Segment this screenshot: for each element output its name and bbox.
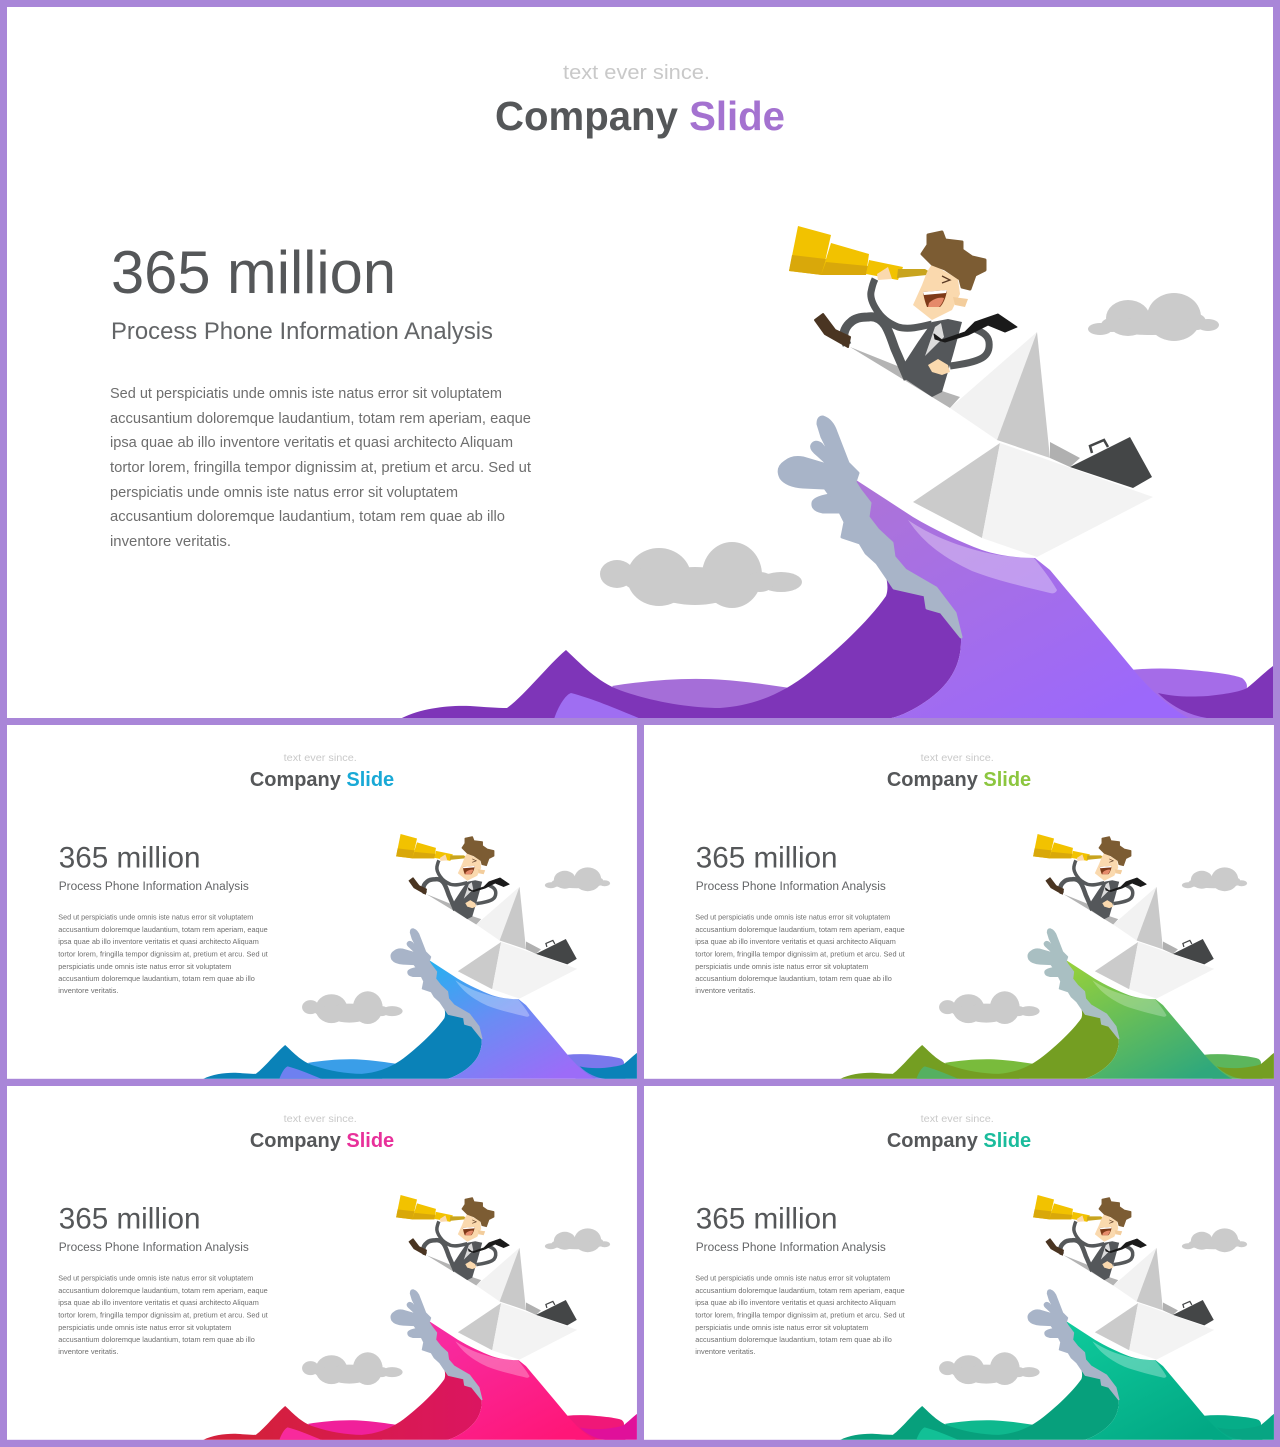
- illustration: pink wave: [203, 1290, 637, 1440]
- body text: Sed ut perspiciatis unde omnis iste natus error sit voluptatem: [58, 1274, 253, 1283]
- body text: accusantium doloremque laudantium, totam rem quae ab illo: [695, 974, 892, 983]
- body text: accusantium doloremque laudantium, totam rem aperiam, eaque: [695, 1286, 905, 1295]
- icon: businessman with telescope: [789, 226, 1017, 397]
- subheading: Process Phone Information Analysis: [59, 1240, 249, 1254]
- body text: inventore veritatis.: [58, 986, 118, 995]
- body text: ipsa quae ab illo inventore veritatis et quasi architecto Aliquam: [58, 1298, 259, 1307]
- body text: ipsa quae ab illo inventore veritatis et quasi architecto Aliquam: [695, 937, 896, 946]
- body text: [58, 913, 269, 995]
- body text: Sed ut perspiciatis unde omnis iste natus error sit voluptatem: [58, 913, 253, 922]
- body text: tortor lorem, fringilla tempor dignissim at, pretium et arcu. Sed ut: [695, 949, 906, 958]
- headline number: 365 million: [111, 239, 396, 306]
- panel: teal slide: [644, 1086, 1274, 1440]
- icon: paper boat with briefcase: [1063, 1248, 1214, 1360]
- body text: accusantium doloremque laudantium, totam rem aperiam, eaque: [695, 925, 905, 934]
- title: Company Slide: [887, 769, 1031, 791]
- illustration: teal wave: [840, 1290, 1274, 1440]
- icon: businessman with telescope: [396, 1195, 510, 1280]
- body text: inventore veritatis.: [58, 1347, 118, 1356]
- icon: businessman with telescope: [396, 834, 510, 919]
- icon: cloud right: [1182, 867, 1247, 891]
- body text: perspiciatis unde omnis iste natus error sit voluptatem: [695, 1323, 868, 1332]
- body text: tortor lorem, fringilla tempor dignissim at, pretium et arcu. Sed ut: [58, 949, 269, 958]
- illustration: blue wave: [203, 929, 637, 1079]
- body text: accusantium doloremque laudantium, totam rem aperiam, eaque: [58, 1286, 268, 1295]
- body text: perspiciatis unde omnis iste natus error sit voluptatem: [110, 484, 458, 501]
- icon: paper boat with briefcase: [426, 887, 577, 999]
- body text: Sed ut perspiciatis unde omnis iste natus error sit voluptatem: [695, 1274, 890, 1283]
- icon: cloud right: [1182, 1228, 1247, 1252]
- illustration: green wave: [840, 929, 1274, 1079]
- headline number: 365 million: [696, 841, 838, 874]
- title: Company Slide: [887, 1130, 1031, 1152]
- body text: accusantium doloremque laudantium, totam rem aperiam, eaque: [110, 410, 531, 427]
- subheading: Process Phone Information Analysis: [696, 1240, 886, 1254]
- panel: green slide: [644, 725, 1274, 1079]
- body text: accusantium doloremque laudantium, totam rem quae ab illo: [110, 508, 505, 525]
- body text: ipsa quae ab illo inventore veritatis et quasi architecto Aliquam: [695, 1298, 896, 1307]
- icon: cloud left: [302, 991, 403, 1024]
- icon: paper boat with briefcase: [850, 332, 1153, 557]
- body text: inventore veritatis.: [695, 986, 755, 995]
- body text: perspiciatis unde omnis iste natus error sit voluptatem: [58, 962, 231, 971]
- body text: perspiciatis unde omnis iste natus error sit voluptatem: [58, 1323, 231, 1332]
- body text: tortor lorem, fringilla tempor dignissim at, pretium et arcu. Sed ut: [58, 1310, 269, 1319]
- icon: paper boat with briefcase: [426, 1248, 577, 1360]
- subtitle: text ever since.: [284, 753, 357, 764]
- body text: [110, 385, 532, 550]
- body text: tortor lorem, fringilla tempor dignissim at, pretium et arcu. Sed ut: [110, 459, 532, 476]
- subtitle: text ever since.: [563, 62, 710, 84]
- illustration: purple wave: [400, 417, 1273, 719]
- icon: businessman with telescope: [1033, 834, 1147, 919]
- body text: Sed ut perspiciatis unde omnis iste natus error sit voluptatem: [110, 385, 502, 402]
- icon: cloud right: [545, 1228, 610, 1252]
- headline number: 365 million: [696, 1202, 838, 1235]
- headline number: 365 million: [59, 841, 201, 874]
- subtitle: text ever since.: [921, 1114, 994, 1125]
- panel: blue slide: [7, 725, 637, 1079]
- subtitle: text ever since.: [284, 1114, 357, 1125]
- body text: [58, 1274, 269, 1356]
- body text: inventore veritatis.: [695, 1347, 755, 1356]
- subheading: Process Phone Information Analysis: [59, 879, 249, 893]
- body text: accusantium doloremque laudantium, totam rem quae ab illo: [58, 1335, 255, 1344]
- title: Company Slide: [250, 1130, 394, 1152]
- icon: cloud left: [939, 991, 1040, 1024]
- subheading: Process Phone Information Analysis: [696, 879, 886, 893]
- icon: cloud left: [302, 1352, 403, 1385]
- icon: paper boat with briefcase: [1063, 887, 1214, 999]
- body text: inventore veritatis.: [110, 533, 231, 550]
- title: Company Slide: [495, 93, 785, 139]
- icon: cloud left: [939, 1352, 1040, 1385]
- panel: pink slide: [7, 1086, 637, 1440]
- panel: main purple slide: [7, 7, 1273, 719]
- subheading: Process Phone Information Analysis: [111, 318, 493, 345]
- body text: accusantium doloremque laudantium, totam rem quae ab illo: [695, 1335, 892, 1344]
- icon: cloud left: [600, 542, 802, 608]
- title: Company Slide: [250, 769, 394, 791]
- body text: [695, 913, 906, 995]
- subtitle: text ever since.: [921, 753, 994, 764]
- icon: cloud right: [545, 867, 610, 891]
- body text: accusantium doloremque laudantium, totam rem aperiam, eaque: [58, 925, 268, 934]
- icon: cloud right: [1088, 293, 1219, 341]
- body text: ipsa quae ab illo inventore veritatis et quasi architecto Aliquam: [58, 937, 259, 946]
- body text: tortor lorem, fringilla tempor dignissim at, pretium et arcu. Sed ut: [695, 1310, 906, 1319]
- body text: [695, 1274, 906, 1356]
- body text: accusantium doloremque laudantium, totam rem quae ab illo: [58, 974, 255, 983]
- icon: businessman with telescope: [1033, 1195, 1147, 1280]
- body text: Sed ut perspiciatis unde omnis iste natus error sit voluptatem: [695, 913, 890, 922]
- body text: perspiciatis unde omnis iste natus error sit voluptatem: [695, 962, 868, 971]
- headline number: 365 million: [59, 1202, 201, 1235]
- body text: ipsa quae ab illo inventore veritatis et quasi architecto Aliquam: [110, 434, 513, 451]
